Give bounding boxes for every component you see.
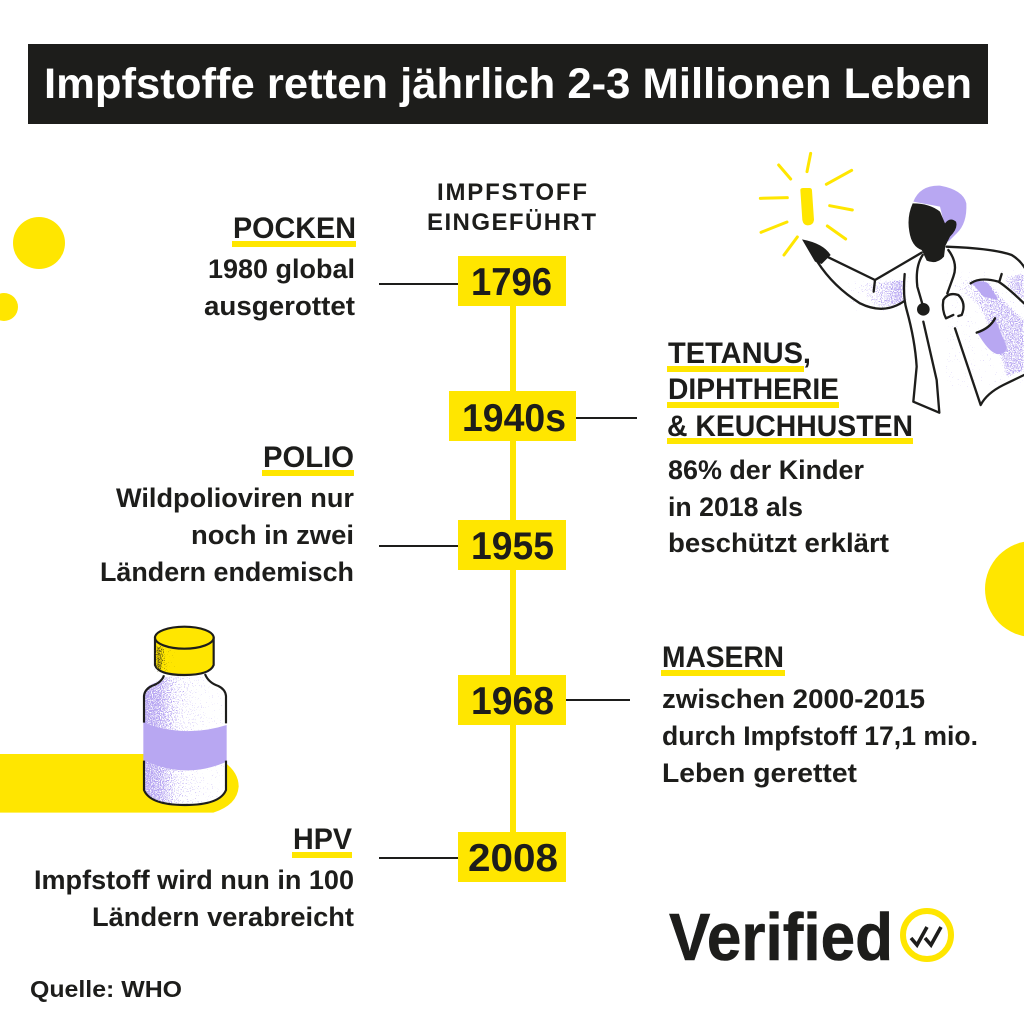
block: Pocken: ausgerottet [204,291,355,321]
block: HPV [34,823,354,932]
cap speckle [157,647,173,670]
block: Masern: durch Impfstoff 17,1 mio. [662,721,978,751]
year: 2008: 2008 [468,837,558,880]
decorative circle right [985,541,1024,637]
block: Pocken: POCKEN [233,212,356,245]
coat shading: shoulder patch [972,281,998,300]
year: 1968: 1968 [471,680,554,723]
source: Quelle: WHO [30,976,182,1002]
block: Polio: POLIO [263,441,354,474]
label [143,723,227,770]
block: Polio: Wildpolioviren nur [116,483,354,513]
title banner [28,44,988,124]
icon: glow rays [760,153,852,255]
coat outlines [817,247,1024,413]
block: Pocken: 1980 global [208,254,355,284]
coat shading: sleeve [853,280,903,308]
block: Masern: MASERN [662,641,784,674]
cap [913,186,966,242]
bottle body [144,677,226,805]
timeline heading [427,179,596,236]
decorative circles left [0,217,65,321]
connector lines [379,283,637,859]
illustration: vaccine bottle [0,627,239,813]
block: HPV: Impfstoff wird nun in 100 [34,865,354,895]
stethoscope [917,255,923,305]
block: Tetanus, Diphtherie, Keuchhusten: & KEUCHHUSTEN [667,410,913,443]
bottle cap [155,638,214,675]
year: 1955: 1955 [471,525,554,568]
year: 1940s: 1940s [462,397,566,440]
illustration: doctor [760,153,1024,413]
timeline heading: EINGEFÜHRT [427,209,596,236]
block: Masern [661,641,978,788]
block: Tetanus, Diphtherie, Keuchhusten [667,337,913,558]
block: Masern: Leben gerettet [662,758,857,788]
block: Polio: noch in zwei [191,520,354,550]
title banner: Impfstoffe retten jährlich 2-3 Millionen Leben [44,60,972,108]
year: 2008 [458,832,566,882]
bottle shading [142,675,228,807]
icon: vaccine dose [800,188,814,225]
block: HPV: HPV [293,823,352,856]
block: Pocken [204,212,356,321]
block: Tetanus, Diphtherie, Keuchhusten: TETANUS, [668,337,811,370]
timeline heading: IMPFSTOFF [437,179,587,206]
year: 1968 [458,675,566,725]
logo: Verified: Verified [669,900,893,975]
block: Tetanus, Diphtherie, Keuchhusten: 86% der Kinder [668,455,864,485]
stethoscope chest piece [917,303,930,316]
cap top [155,627,214,649]
pocket [977,318,1007,354]
year: 1796 [458,256,566,306]
timeline axis [510,300,516,840]
head silhouette [909,203,957,262]
block: HPV: Ländern verabreicht [92,902,354,932]
block: Polio [100,441,354,587]
bottle outline [144,674,226,805]
block: Tetanus, Diphtherie, Keuchhusten: in 2018 als [668,492,803,522]
hand [802,239,831,264]
year: 1796: 1796 [471,261,552,304]
block: Masern: zwischen 2000-2015 [662,684,925,714]
block: Tetanus, Diphtherie, Keuchhusten: beschützt erklärt [668,528,889,558]
block: Tetanus, Diphtherie, Keuchhusten: DIPHTHERIE [668,373,839,406]
coat shading: body [953,280,1024,377]
year: 1955 [458,520,566,570]
coat shading: right sleeve [1003,273,1024,300]
yellow shadow bar [0,754,239,813]
block: Polio: Ländern endemisch [100,557,354,587]
